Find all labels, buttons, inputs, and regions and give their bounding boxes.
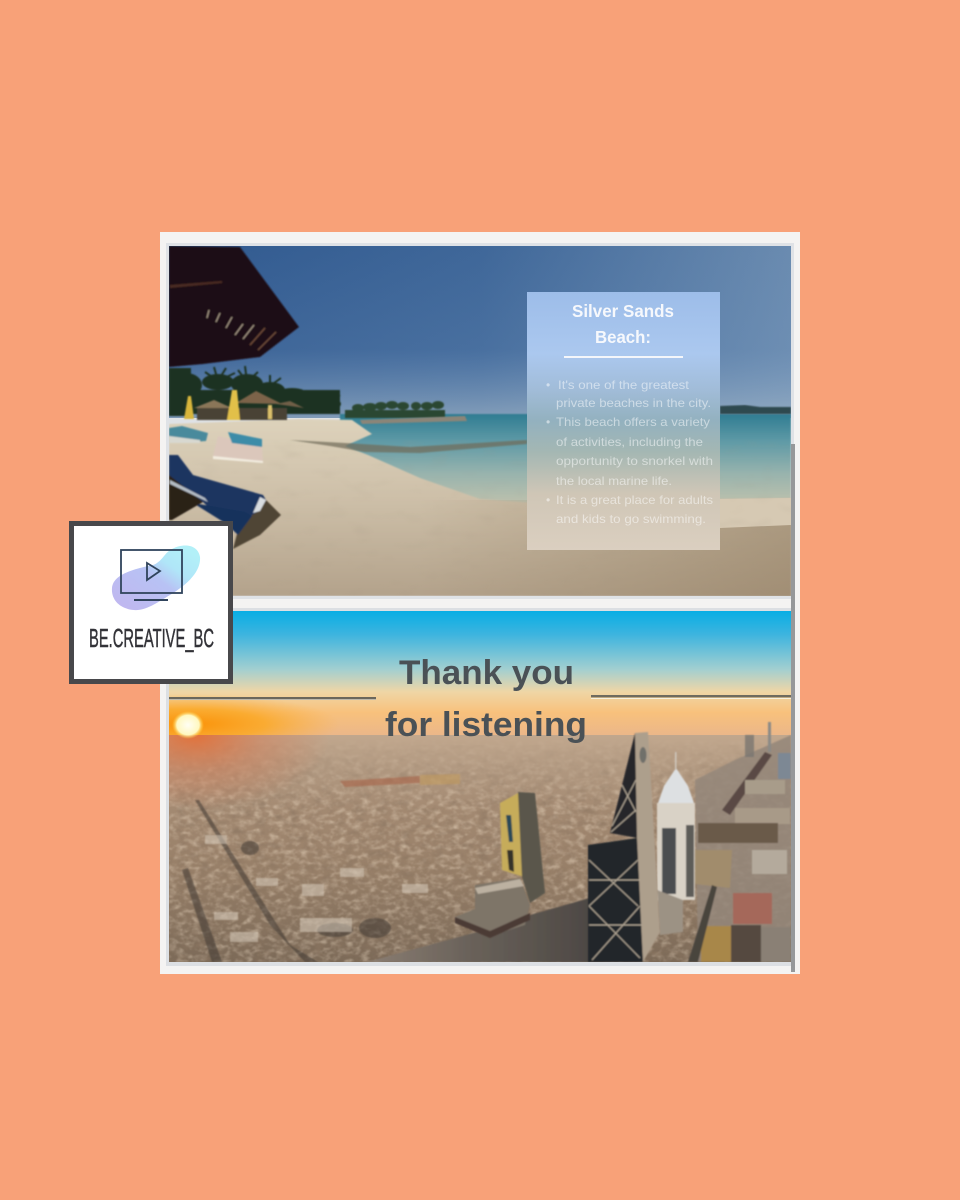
bullet list: • (546, 378, 550, 392)
panel heading: Silver Sands (572, 301, 674, 321)
distant island (720, 405, 791, 414)
panel heading: Beach: (595, 327, 651, 347)
bullet list: and kids to go swimming. (556, 512, 706, 526)
bullet list: It is a great place for adults (556, 493, 713, 507)
bullet list: • (546, 493, 550, 507)
bullet list: of activities, including the (556, 435, 703, 449)
bullet list: private beaches in the city. (556, 396, 711, 410)
bullet list: It's one of the greatest (558, 378, 690, 392)
right side distant city (688, 722, 791, 962)
jetty (360, 416, 467, 424)
low building (455, 878, 530, 938)
sun (172, 711, 204, 739)
city glow below sun (169, 735, 309, 796)
bullet list (546, 378, 713, 526)
sun loungers (169, 426, 281, 549)
thank you heading (385, 654, 587, 744)
sunset sky (169, 611, 791, 741)
wet sand strip (290, 440, 527, 453)
beach sky (169, 246, 791, 418)
yellow tower (500, 792, 545, 903)
sand beach (169, 419, 791, 596)
white slide frame (160, 232, 800, 974)
logo icon: video monitor (112, 545, 200, 610)
panel heading (572, 304, 674, 343)
streets and dark foliage (182, 800, 391, 962)
palm tree line (169, 366, 445, 418)
bullet list: • (546, 415, 550, 429)
sea (340, 414, 791, 506)
infographic canvas (69, 232, 800, 974)
huts and parasols (184, 390, 304, 420)
white tower (657, 752, 695, 935)
pale rooftops (205, 835, 428, 942)
bullet list: the local marine life. (556, 474, 672, 488)
horizontal rule right (591, 695, 791, 699)
bullet list: This beach offers a variety (556, 415, 710, 429)
thank you heading: Thank you (399, 654, 574, 692)
road in foreground (367, 898, 590, 962)
frosted text panel (527, 292, 720, 550)
bullet list: opportunity to snorkel with (556, 454, 713, 468)
logo wordmark: BE.CREATIVE_BC (89, 623, 214, 653)
slide: Silver Sands Beach (169, 246, 791, 596)
logo card (72, 524, 230, 682)
horizontal rule left (169, 697, 376, 700)
city ground (169, 735, 791, 962)
tall triangular tower (588, 732, 660, 962)
sun glow (169, 696, 330, 735)
thatched umbrella (169, 246, 299, 367)
heading underline (564, 356, 683, 358)
thank you heading: for listening (385, 706, 587, 744)
slide: Thank you (169, 611, 791, 962)
